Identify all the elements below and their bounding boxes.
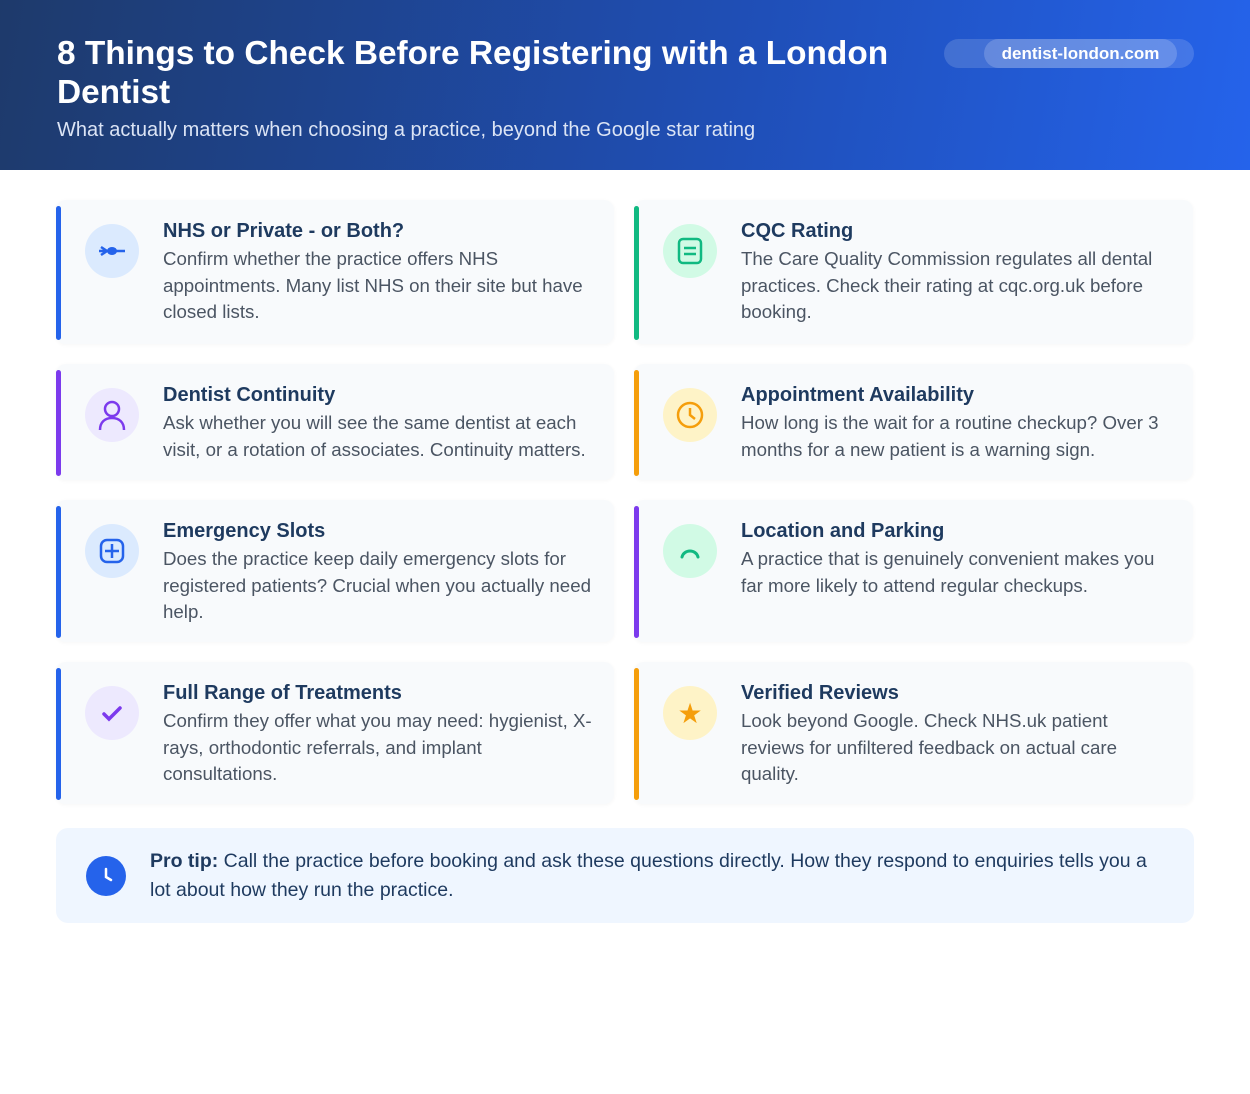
card: Dentist Continuity: Ask whether you will see the same dentist at each visit, or a rotation of associates. Continuity matters.	[163, 412, 586, 460]
icon: check	[85, 686, 139, 740]
icon: arc	[663, 524, 717, 578]
card: Full Range	[56, 662, 614, 804]
card: Full Range: Confirm they offer what you may need: hygienist, X-rays, orthodontic referrals, and implant consultations.	[163, 710, 592, 784]
icon: plus box	[85, 524, 139, 578]
card: Dentist Continuity: Dentist Continuity	[163, 384, 335, 406]
icon: nhs	[85, 224, 139, 278]
card: Appointment Availability: Appointment Availability	[741, 384, 974, 406]
icon: clock	[86, 856, 126, 896]
card: Location and Parking: A practice that is genuinely convenient makes you far more likely to attend regular checkups.	[741, 548, 1154, 596]
card: Appointment Availability	[634, 364, 1193, 480]
card: Emergency Slots: Does the practice keep daily emergency slots for registered patients? Crucial when you actually need help.	[163, 548, 591, 622]
card: CQC: CQC Rating	[741, 220, 853, 242]
badge: site	[944, 39, 1194, 68]
icon: person	[85, 388, 139, 442]
pro tip callout	[56, 828, 1194, 923]
icon: clock	[663, 388, 717, 442]
subtitle: What actually matters when choosing a practice, beyond the Google star rating	[57, 119, 755, 141]
title: 8 Things to Check Before Registering with a London Dentist	[57, 35, 888, 111]
card: NHS or Private: NHS or Private - or Both?	[163, 220, 404, 242]
card: Location and Parking: Location and Parking	[741, 520, 944, 542]
icon: star: ★	[677, 698, 703, 728]
icon: document	[663, 224, 717, 278]
card: CQC	[634, 200, 1193, 344]
card: Verified Reviews	[634, 662, 1193, 804]
card: Emergency Slots: Emergency Slots	[163, 520, 325, 542]
card: Location and Parking	[634, 500, 1193, 642]
card: CQC: The Care Quality Commission regulates all dental practices. Check their rating at cqc.org.uk before booking.	[741, 248, 1152, 322]
card: Verified Reviews: Verified Reviews	[741, 682, 899, 704]
pro tip callout: Pro tip: Call the practice before booking and ask these questions directly. How they respond to enquiries tells you a lot about how they run the practice.	[150, 850, 1147, 901]
card: Verified Reviews: Look beyond Google. Check NHS.uk patient reviews for unfiltered feedback on actual care quality.	[741, 710, 1117, 784]
card: Emergency Slots	[56, 500, 614, 642]
header	[0, 0, 1250, 170]
card: Appointment Availability: How long is the wait for a routine checkup? Over 3 months for a new patient is a warning sign.	[741, 412, 1159, 460]
card: NHS or Private: Confirm whether the practice offers NHS appointments. Many list NHS on their site but have closed lists.	[163, 248, 583, 322]
card: Dentist Continuity	[56, 364, 614, 480]
badge: site: dentist-london.com	[1002, 44, 1159, 63]
icon: star	[663, 686, 717, 740]
card: NHS or Private	[56, 200, 614, 344]
card: Full Range: Full Range of Treatments	[163, 682, 402, 704]
